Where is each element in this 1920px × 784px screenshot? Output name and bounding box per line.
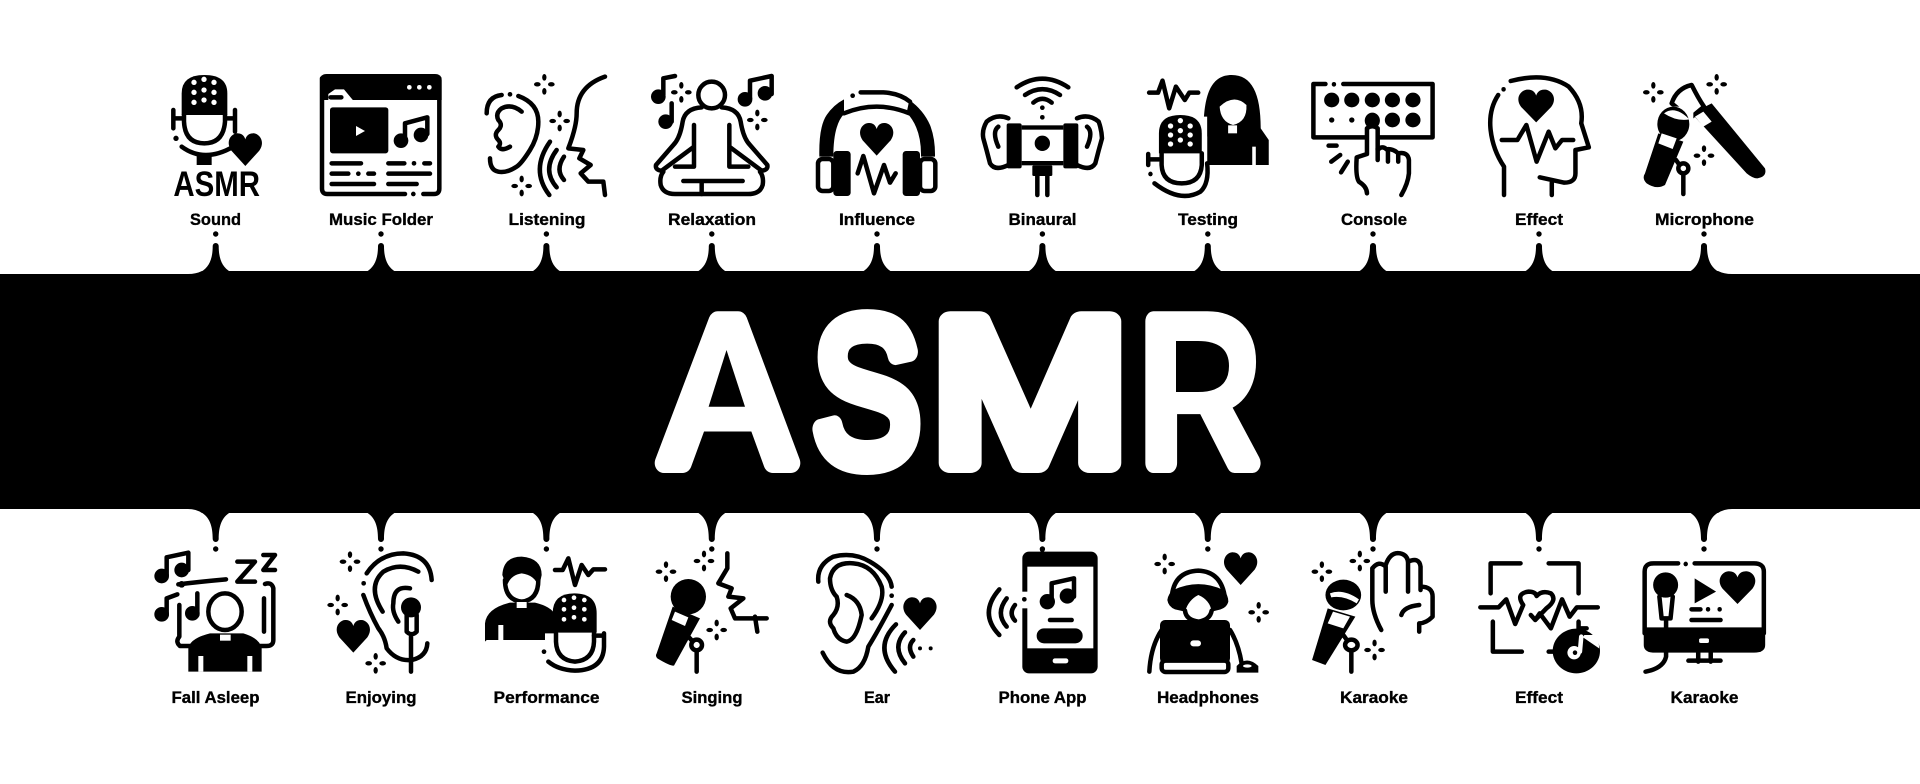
icon: headphones person with laptop	[1149, 552, 1269, 673]
icon: influence headphones	[818, 92, 935, 196]
bottom connectors	[201, 512, 1719, 552]
icon: singing microphone and face	[656, 551, 767, 672]
label: Enjoying: Enjoying	[346, 689, 416, 707]
title: ASMR: R	[1140, 276, 1260, 507]
icon: karaoke monitor	[1644, 562, 1765, 672]
icon: listening ear and face	[487, 74, 605, 196]
label: Ear: Ear	[864, 689, 891, 707]
central band	[0, 271, 1920, 513]
icon: fall asleep person	[154, 553, 275, 672]
label: Phone App: Phone App	[998, 689, 1086, 707]
icon: karaoke microphone and hand	[1312, 551, 1433, 672]
icon: binaural microphone	[983, 79, 1102, 195]
icon: performance man and microphone	[485, 557, 607, 673]
icon: console keypad and hand	[1313, 82, 1433, 195]
icon: ear with heart	[818, 555, 937, 672]
icon: testing woman and microphone	[1148, 75, 1269, 196]
label: Performance: Performance	[494, 689, 600, 707]
label: Karaoke: Karaoke	[1340, 689, 1408, 707]
title: ASMR: S	[813, 278, 920, 508]
label: Binaural: Binaural	[1008, 211, 1076, 229]
top connectors	[201, 231, 1719, 272]
label: Karaoke (monitor): Karaoke	[1670, 689, 1738, 707]
icon: effect heart pulse and disc	[1480, 563, 1600, 673]
label: Console: Console	[1341, 211, 1407, 229]
title: ASMR	[664, 276, 1260, 508]
icon: microphones crossed	[1643, 74, 1765, 194]
label: Testing: Testing	[1178, 211, 1238, 229]
label: Singing: Singing	[682, 689, 742, 707]
icon: sound microphone: ASMR	[173, 165, 260, 204]
label: Effect (bottom): Effect	[1515, 689, 1564, 707]
title: ASMR: A	[664, 278, 792, 508]
icon: phone app	[989, 548, 1098, 673]
label: Headphones: Headphones	[1157, 689, 1259, 707]
label: Microphone: Microphone	[1655, 211, 1754, 229]
icon: relaxation meditating figure	[651, 76, 772, 194]
label: Relaxation: Relaxation	[668, 211, 756, 229]
icon: sound microphone	[173, 75, 262, 204]
label: Effect: Effect	[1515, 211, 1564, 229]
label: Influence: Influence	[839, 211, 915, 229]
label: Sound: Sound	[190, 211, 241, 229]
icon: music folder	[320, 74, 442, 196]
label: Listening: Listening	[508, 211, 586, 229]
icon: enjoying earbud	[327, 551, 432, 674]
title: ASMR: M	[931, 277, 1129, 507]
icon: effect head with heart	[1490, 77, 1589, 195]
label: Fall Asleep: Fall Asleep	[172, 689, 260, 707]
label: Music Folder: Music Folder	[329, 211, 434, 229]
